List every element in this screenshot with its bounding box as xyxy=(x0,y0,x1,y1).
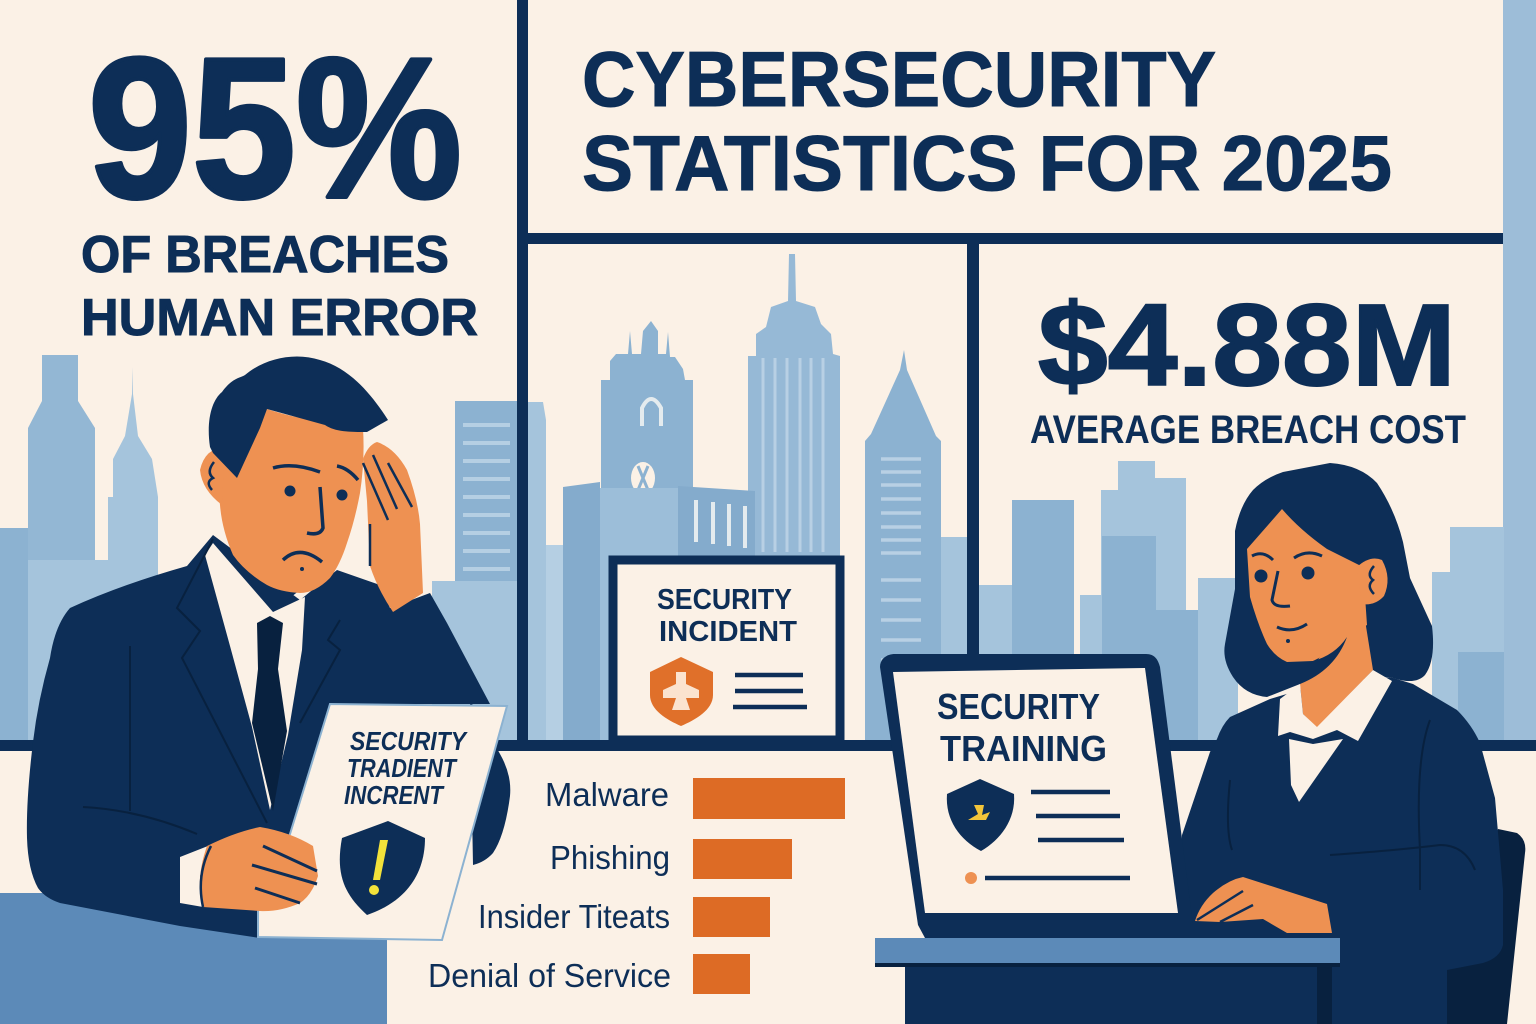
title xyxy=(582,35,1392,207)
suit back sleeve xyxy=(470,700,510,865)
shirt V xyxy=(1289,739,1343,802)
sweater folds xyxy=(1228,720,1475,890)
icon: navy shield xyxy=(947,779,1014,851)
security incident sign: SECURITY xyxy=(657,584,792,616)
stat: breach cost xyxy=(1030,280,1466,452)
neck xyxy=(1300,620,1373,728)
right edge blue strip xyxy=(1503,0,1536,740)
bar chart: attack types: Insider Titeats xyxy=(478,898,670,935)
chair xyxy=(1447,829,1525,1024)
stat: 95 percent: 95% xyxy=(88,17,462,240)
man xyxy=(27,356,510,938)
security incident sign xyxy=(613,560,840,740)
shirt xyxy=(205,543,305,810)
suit xyxy=(27,535,490,938)
skyline: left panel xyxy=(0,355,517,740)
tie xyxy=(252,616,287,811)
stat: 95 percent: HUMAN ERROR xyxy=(81,289,478,347)
laptop: TRAINING xyxy=(940,728,1107,769)
bar chart: attack types: Denial of Service xyxy=(428,957,671,994)
skyline: centre panel xyxy=(528,254,967,740)
title: STATISTICS FOR 2025 xyxy=(582,119,1392,207)
title: CYBERSECURITY xyxy=(582,35,1216,123)
face details xyxy=(1252,553,1322,630)
stat: breach cost: AVERAGE BREACH COST xyxy=(1030,408,1466,452)
hair xyxy=(209,356,388,478)
document held by man: INCRENT xyxy=(344,780,445,810)
face details xyxy=(273,466,358,562)
stat: 95 percent xyxy=(81,17,478,347)
skyline: right panel xyxy=(979,461,1504,740)
stat: breach cost: $4.88M xyxy=(1038,280,1456,410)
document held by man: TRADIENT xyxy=(347,753,458,783)
ear xyxy=(1357,559,1388,604)
man's hand holding document xyxy=(180,827,318,911)
hand xyxy=(1195,877,1332,933)
bar chart: attack types xyxy=(428,776,845,994)
woman xyxy=(905,463,1525,1024)
laptop: SECURITY xyxy=(937,686,1100,727)
chin shadow xyxy=(227,535,300,608)
sweater xyxy=(905,677,1503,1024)
desk: left xyxy=(0,893,387,1024)
desk: right xyxy=(875,938,1340,1024)
document held by man: SECURITY xyxy=(350,726,468,756)
icon: orange shield xyxy=(650,657,713,726)
window frame lines xyxy=(0,0,1536,751)
face xyxy=(213,409,364,593)
jaw shadow xyxy=(1287,637,1347,684)
collar xyxy=(1278,670,1392,741)
laptop xyxy=(880,654,1193,938)
stat: 95 percent: OF BREACHES xyxy=(81,226,449,284)
suit folds xyxy=(83,539,340,834)
bar chart: attack types: Malware xyxy=(545,776,669,813)
face xyxy=(1247,509,1367,663)
bar chart: attack types: Phishing xyxy=(550,839,670,876)
security incident sign: INCIDENT xyxy=(659,616,797,648)
document held by man xyxy=(258,704,507,940)
hair xyxy=(1224,463,1433,697)
raised hand xyxy=(363,442,423,612)
icon: warning shield xyxy=(340,821,425,915)
ear xyxy=(200,447,225,505)
